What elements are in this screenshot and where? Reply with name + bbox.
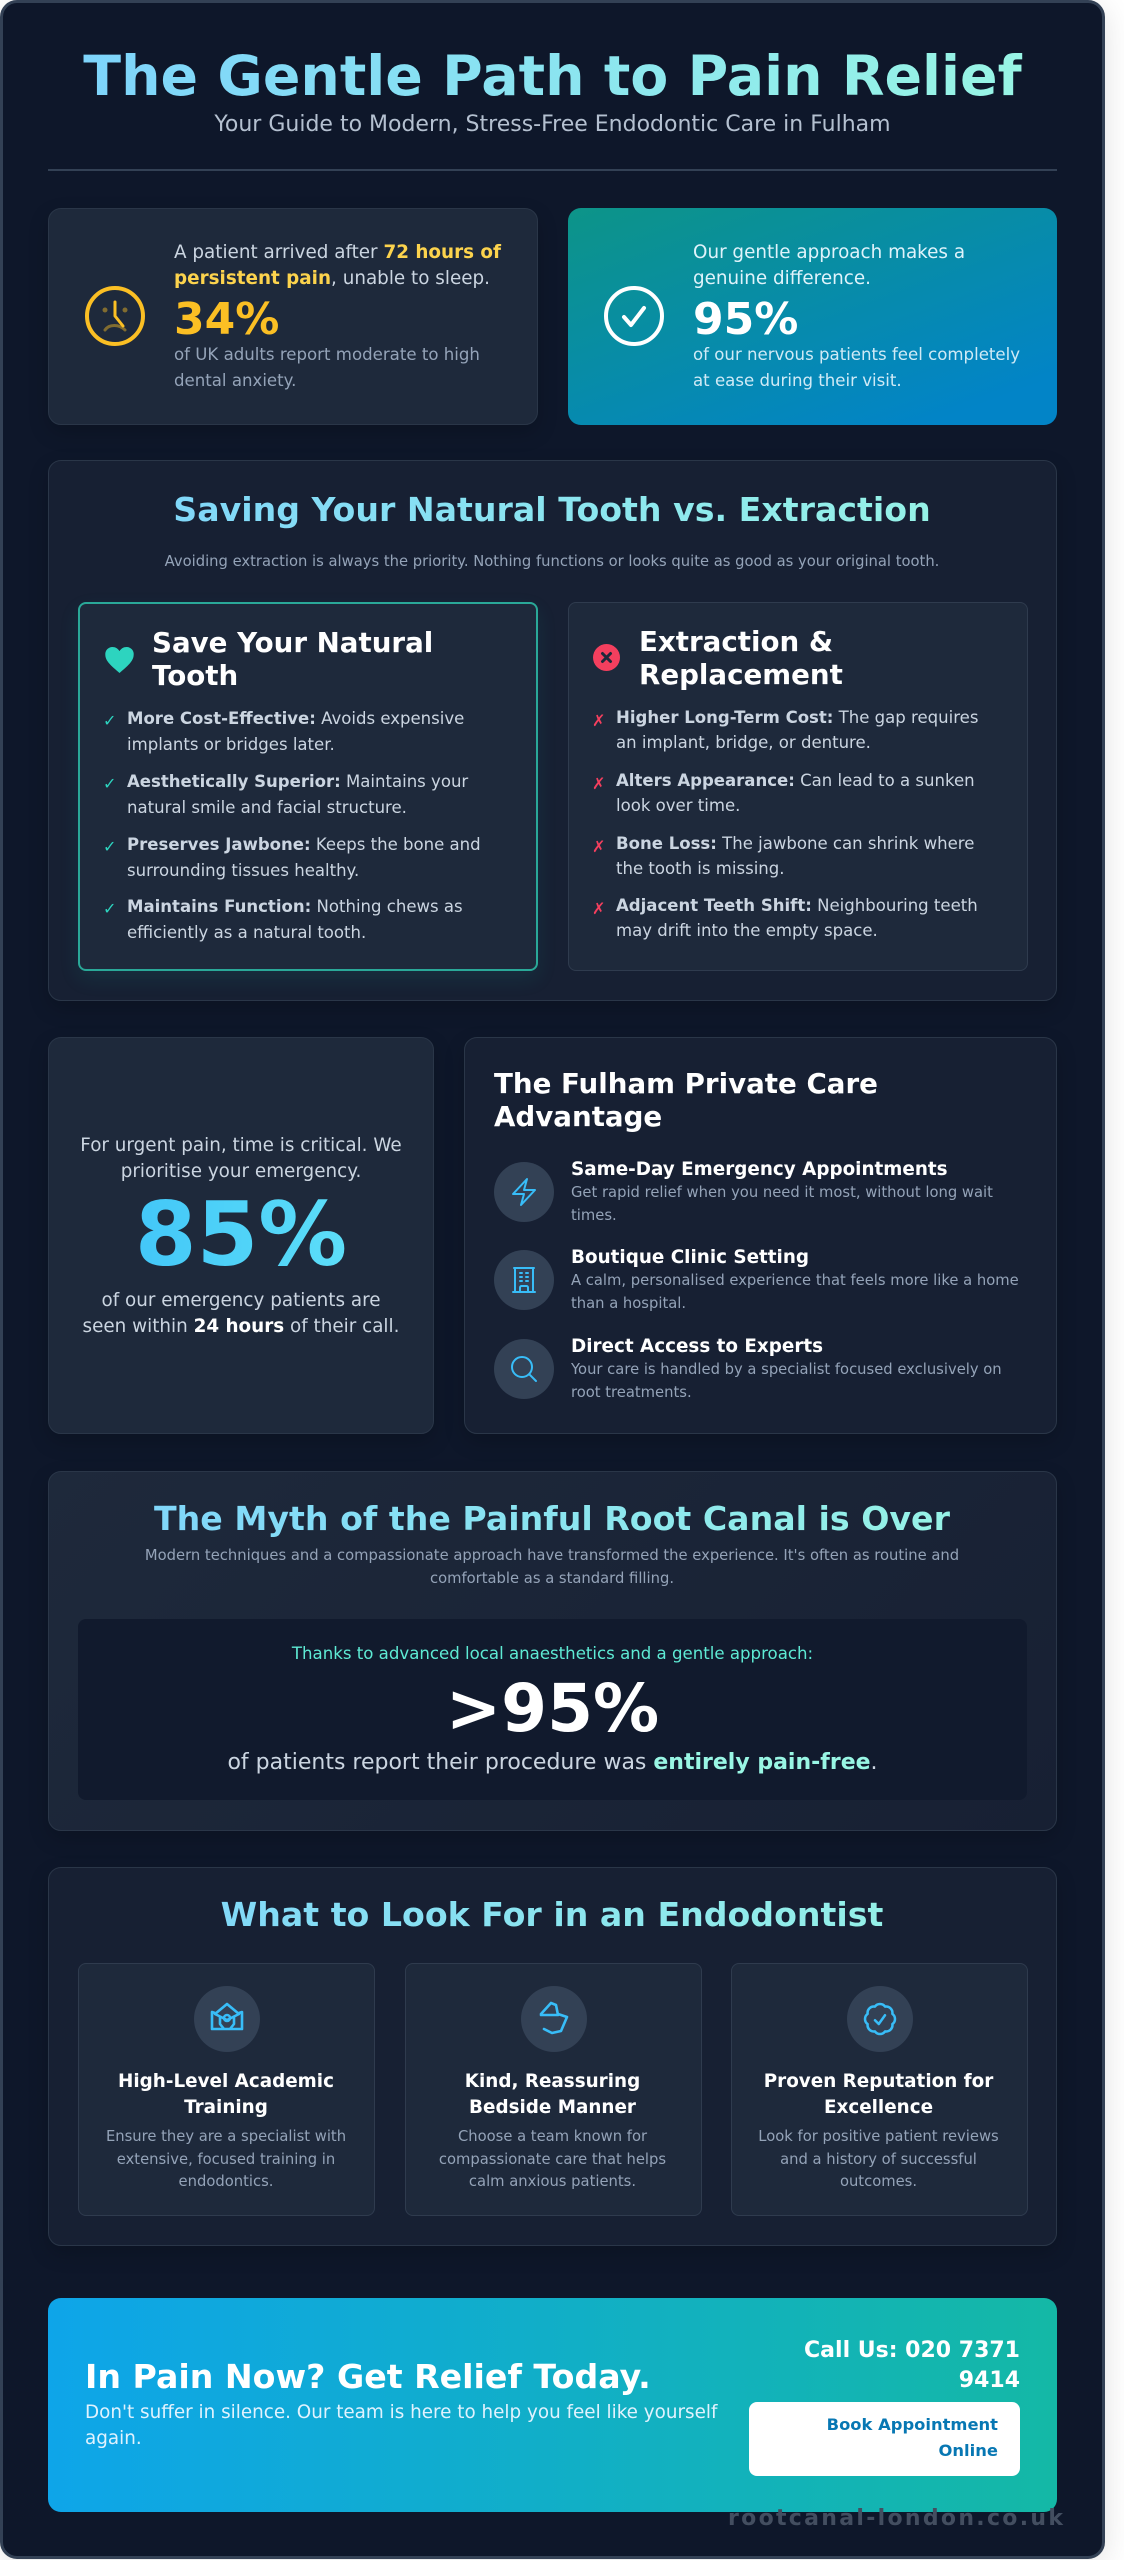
benefit: experts: [494, 1336, 1002, 1400]
heading: [494, 1067, 878, 1133]
stat: 85%: 85%: [135, 1183, 347, 1286]
stat caption: of our nervous patients feel completely: [693, 345, 1020, 364]
list: ✗: [592, 836, 605, 856]
intro text: Avoiding extraction is always the priority. Nothing functions or looks quite as good as your original tooth.: [165, 553, 939, 570]
item: Bone Loss: The jawbone can shrink where: [616, 834, 974, 852]
icon: heart: [105, 647, 134, 673]
stat caption: [174, 345, 480, 390]
reassurance text: [693, 242, 965, 288]
benefit: boutique: [494, 1247, 1019, 1312]
item: efficiently as a natural tooth.: [127, 923, 366, 942]
lead-in: Thanks to advanced local anaesthetics and a gentle approach:: [292, 1644, 813, 1663]
watermark: rootcanal-london.co.uk: [728, 2506, 1065, 2531]
list: ✓: [103, 899, 116, 918]
icon: building: [494, 1250, 554, 1310]
button: Book Appointment: [827, 2415, 998, 2434]
stat: 34%: 34%: [174, 294, 279, 345]
item: [127, 772, 468, 817]
stat: >95%: >95%: [446, 1670, 659, 1747]
icon: hand: [520, 1986, 586, 2052]
heading: In Pain Now? Get Relief Today.: [85, 2357, 651, 2396]
phone number: 9414: [959, 2368, 1020, 2393]
intro text: Modern techniques and a compassionate approach have transformed the experience. It's often as routine and: [145, 1547, 959, 1564]
card title: Replacement: [639, 658, 843, 691]
story text: persistent pain, unable to sleep.: [174, 268, 490, 289]
item: implants or bridges later.: [127, 735, 335, 754]
stat caption: [693, 345, 1020, 390]
text: Proven Reputation for: [764, 2071, 993, 2092]
panel: anxiety stat: [48, 208, 538, 425]
item: [616, 834, 974, 878]
text: [85, 2402, 718, 2449]
item: [616, 770, 975, 815]
text: [465, 2071, 640, 2118]
item: Aesthetically Superior: Maintains your: [127, 772, 468, 791]
text: Direct Access to Experts: [571, 1336, 823, 1357]
callout: pain-free stat: [78, 1619, 1027, 1800]
item: Higher Long-Term Cost: The gap requires: [616, 708, 978, 726]
item: Preserves Jawbone: Keeps the bone and: [127, 835, 481, 854]
benefit: boutique: than a hospital.: [571, 1294, 686, 1312]
list: [592, 708, 978, 940]
intro text: [80, 1135, 402, 1182]
panel: what to look for: [48, 1867, 1057, 2246]
heading: The Fulham Private Care: [494, 1067, 878, 1100]
phone number: [804, 2338, 1020, 2393]
text: again.: [85, 2428, 142, 2449]
title: The Gentle Path to Pain Relief: [83, 45, 1022, 109]
stat caption: at ease during their visit.: [693, 371, 902, 390]
item: natural smile and facial structure.: [127, 798, 407, 817]
card: extraction: [568, 602, 1028, 971]
benefit: same-day: times.: [571, 1206, 617, 1224]
card: training: Ensure they are a specialist with: [106, 2128, 346, 2145]
panel: myth section: [48, 1471, 1057, 1831]
text: Training: [184, 2097, 268, 2118]
card: reputation: [730, 1963, 1028, 2216]
item: [127, 835, 481, 880]
card: reputation: Look for positive patient reviews: [758, 2128, 999, 2145]
text: [118, 2071, 334, 2118]
stat caption: of our emergency patients are: [101, 1290, 381, 1311]
benefit: boutique: A calm, personalised experience that feels more like a home: [571, 1272, 1019, 1289]
intro text: comfortable as a standard filling.: [430, 1570, 674, 1586]
stat caption: of UK adults report moderate to high: [174, 345, 480, 364]
icon: badge check: [846, 1986, 912, 2052]
card: bedside manner: [404, 1963, 702, 2216]
card: training: endodontics.: [179, 2173, 273, 2190]
card: training: extensive, focused training in: [117, 2150, 335, 2168]
reassurance text: Our gentle approach makes a: [693, 242, 965, 262]
heading: The Myth of the Painful Root Canal is Over: [154, 1499, 950, 1538]
reassurance text: genuine difference.: [693, 268, 871, 288]
card: reputation: and a history of successful: [780, 2150, 977, 2168]
text: Same-Day Emergency Appointments: [571, 1159, 948, 1180]
intro text: [145, 1547, 959, 1586]
icon: red cross: [593, 644, 620, 671]
item: More Cost-Effective: Avoids expensive: [127, 709, 464, 728]
list: ✓: [103, 837, 116, 856]
intro text: prioritise your emergency.: [121, 1161, 361, 1182]
heading: [49, 489, 1055, 531]
text: [764, 2071, 994, 2118]
benefit: same-day: [494, 1159, 993, 1224]
icon: bolt: [494, 1162, 554, 1222]
panel: gentle approach stat: [568, 208, 1057, 425]
item: an implant, bridge, or denture.: [616, 733, 871, 752]
list: ✓: [103, 774, 116, 793]
stat caption: seen within 24 hours of their call.: [83, 1316, 399, 1337]
panel: call to action: [48, 2298, 1057, 2512]
card: bedside manner: compassionate care that helps: [439, 2150, 666, 2168]
icon: check circle: [604, 286, 664, 346]
icon: search: [494, 1339, 554, 1399]
text: Bedside Manner: [469, 2097, 636, 2118]
intro text: For urgent pain, time is critical. We: [80, 1135, 402, 1156]
stat caption: [83, 1290, 399, 1337]
stat: 95%: 95%: [693, 294, 798, 345]
card: reputation: outcomes.: [840, 2173, 917, 2190]
heading: Advantage: [494, 1100, 662, 1133]
item: Maintains Function: Nothing chews as: [127, 897, 463, 916]
card: save tooth: [78, 602, 538, 971]
heading: What to Look For in an Endodontist: [221, 1895, 883, 1934]
heading: [49, 1894, 1055, 1936]
icon: academic cap: [194, 1986, 260, 2052]
list: ✗: [592, 774, 605, 792]
card title: Save Your Natural: [152, 626, 433, 659]
text: Boutique Clinic Setting: [571, 1247, 809, 1268]
header: [83, 45, 1022, 137]
benefit: experts: Your care is handled by a specialist focused exclusively on: [571, 1361, 1002, 1378]
card: bedside manner: calm anxious patients.: [469, 2173, 636, 2190]
story text: A patient arrived after 72 hours of: [174, 242, 501, 263]
stat caption: dental anxiety.: [174, 371, 296, 390]
list: ✗: [592, 710, 605, 730]
list: ✓: [103, 711, 116, 730]
item: surrounding tissues healthy.: [127, 861, 359, 880]
text: Don't suffer in silence. Our team is here to help you feel like yourself: [85, 2402, 717, 2423]
phone number: Call Us: 020 7371: [804, 2338, 1020, 2363]
icon: sad clock: [85, 286, 145, 346]
item: the tooth is missing.: [616, 859, 785, 878]
item: [127, 709, 464, 754]
panel: emergency stat: [48, 1037, 434, 1434]
item: Adjacent Teeth Shift: Neighbouring teeth: [616, 896, 978, 914]
benefit: experts: root treatments.: [571, 1384, 692, 1400]
subtitle: Your Guide to Modern, Stress-Free Endodontic Care in Fulham: [214, 112, 891, 137]
list: [103, 709, 481, 942]
card title: Extraction &: [639, 625, 833, 658]
list: ✗: [592, 898, 605, 918]
item: [616, 708, 978, 752]
card title: Tooth: [152, 659, 238, 692]
item: Alters Appearance: Can lead to a sunken: [616, 770, 975, 790]
card title: [152, 626, 433, 692]
stat: 85%: [49, 1180, 433, 1290]
story text: [174, 242, 502, 289]
item: may drift into the empty space.: [616, 921, 878, 940]
item: [616, 896, 978, 940]
button: Online: [939, 2441, 998, 2460]
caption: of patients report their procedure was entirely pain-free.: [227, 1750, 878, 1775]
card: training: [78, 1963, 375, 2216]
heading: Saving Your Natural Tooth vs. Extraction: [173, 490, 931, 529]
text: Excellence: [824, 2097, 933, 2118]
panel: tooth vs extraction: [48, 460, 1057, 1001]
button: [749, 2402, 1020, 2476]
card title: [639, 625, 843, 691]
text: Kind, Reassuring: [465, 2071, 640, 2092]
item: [127, 897, 463, 942]
benefit: same-day: Get rapid relief when you need it most, without long wait: [571, 1184, 993, 1201]
panel: private care advantage: [464, 1037, 1057, 1434]
text: High-Level Academic: [118, 2071, 334, 2092]
card: bedside manner: Choose a team known for: [458, 2128, 647, 2145]
item: look over time.: [616, 796, 740, 815]
